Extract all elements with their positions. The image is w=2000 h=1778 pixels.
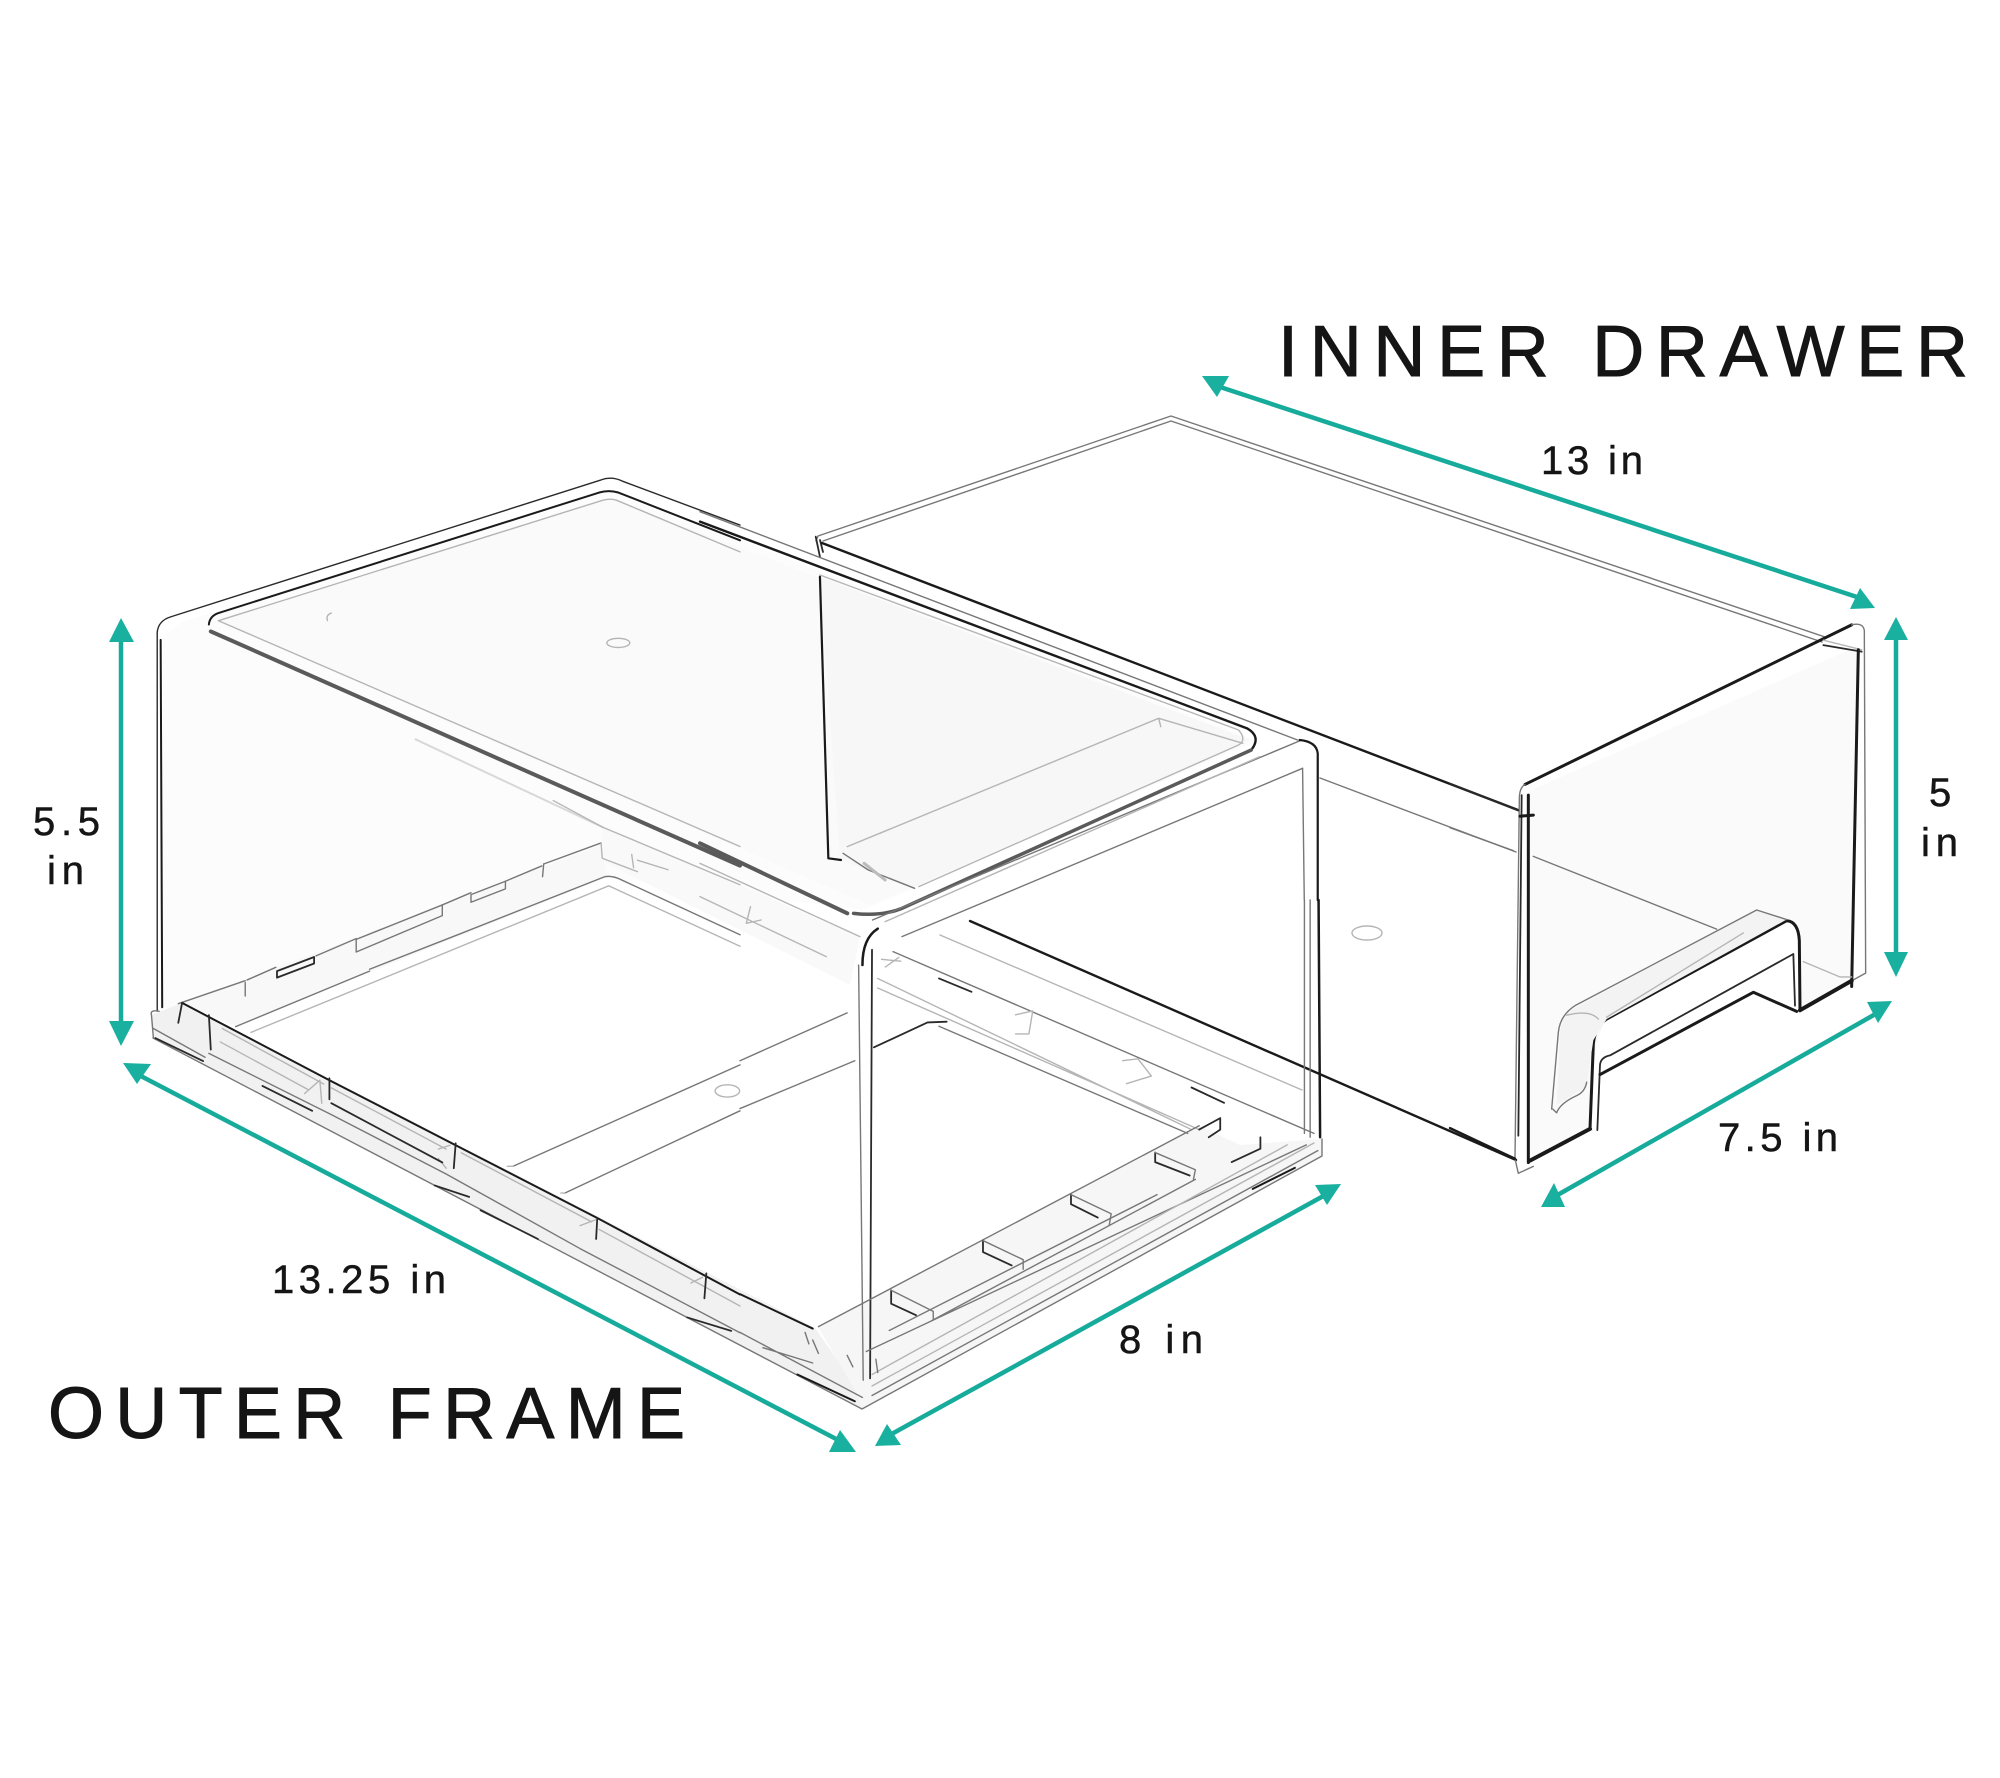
inner drawer front panel with handle (1450, 624, 1866, 1173)
label: 5.5 in height (outer frame): 5.5 (33, 800, 100, 844)
label: 7.5 in: 7.5 in (1718, 1116, 1838, 1160)
outer frame base bottom edge (153, 1038, 1322, 1409)
arrow: 13.25 in length (123, 1063, 856, 1452)
outer frame floor and left rail (151, 843, 740, 1333)
arrow: 7.5 in width (1541, 1001, 1892, 1207)
arrow: 5 in height (1884, 617, 1908, 977)
arrow: 8 in width (875, 1184, 1341, 1446)
label: 5 in height (inner drawer): in (1921, 821, 1958, 865)
outer frame back-right partition and lid corner (700, 512, 1318, 957)
inner drawer floor hole (1352, 926, 1382, 940)
label: 5.5 in height (outer frame): in (47, 849, 84, 893)
outer frame top rim and lid (upper-left) (157, 478, 740, 1011)
outer frame front legs and right rail (740, 900, 1320, 1401)
label: 13 in: 13 in (1541, 439, 1643, 483)
label: 5 in height (inner drawer): 5 (1929, 771, 1951, 815)
label: 13.25 in: 13.25 in (272, 1258, 446, 1302)
label: 8 in: 8 in (1119, 1318, 1203, 1362)
heading: outer frame: OUTER FRAME (48, 1374, 685, 1454)
arrow: 5.5 in height (109, 618, 134, 1046)
arrow: 13 in length (1202, 376, 1875, 609)
handle grip (1557, 910, 1787, 1105)
outer frame (151, 478, 1322, 1409)
heading: inner drawer: INNER DRAWER (1278, 312, 1968, 392)
outer frame light panels (151, 492, 1322, 1409)
inner drawer (816, 416, 1866, 1173)
label: 5.5 in height (outer frame) (33, 800, 100, 893)
inner drawer top and long side (816, 416, 1825, 1160)
label: 5 in height (inner drawer) (1921, 771, 1958, 865)
